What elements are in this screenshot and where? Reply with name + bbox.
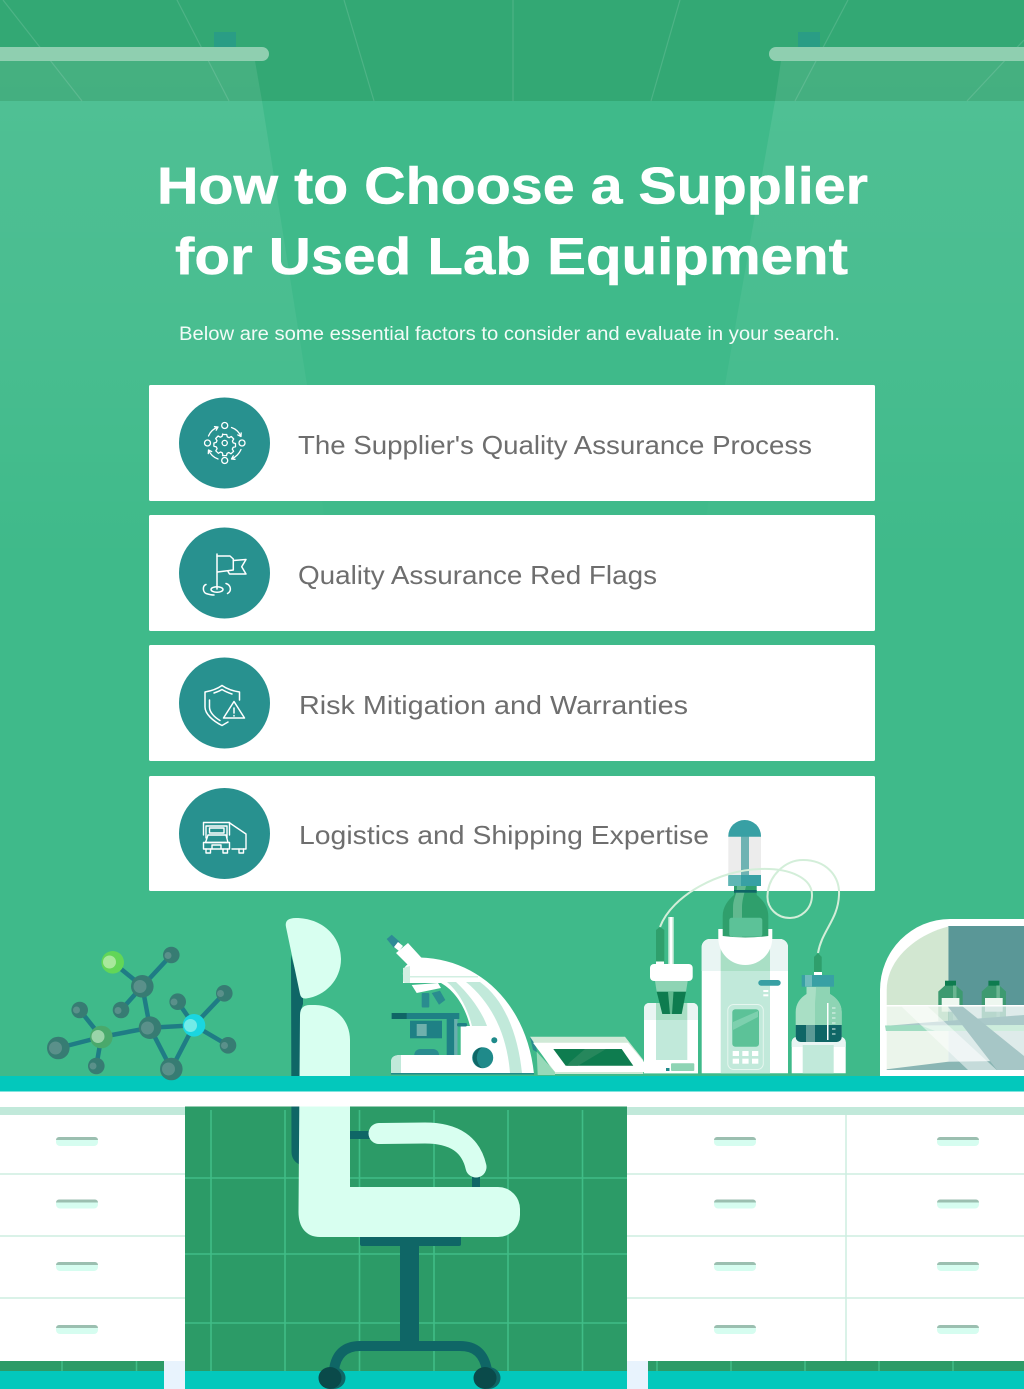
card: quality assurance process: The Supplier's Quality Assurance Process	[298, 430, 812, 460]
molecule model	[47, 947, 236, 1080]
left funnel device	[644, 917, 698, 1073]
card: red flags: Quality Assurance Red Flags	[298, 560, 657, 590]
title	[157, 158, 868, 286]
bottle top dispenser	[728, 820, 761, 886]
main analyser device	[702, 886, 788, 1073]
card: quality assurance process	[149, 385, 875, 501]
card: red flags	[149, 515, 875, 631]
floor and cabinet plinth	[0, 1361, 1024, 1389]
left drawers	[0, 1106, 185, 1361]
subtitle: Below are some essential factors to consider and evaluate in your search.	[179, 324, 840, 345]
right reagent bottle	[792, 953, 846, 1073]
ceiling lamp right	[769, 32, 1024, 61]
cabinet knee space with grid	[185, 1106, 627, 1371]
flexible tubing	[660, 860, 839, 953]
right drawers	[627, 1106, 1024, 1361]
title: for Used Lab Equipment	[175, 228, 848, 286]
chair	[286, 918, 520, 1389]
card: risk mitigation: Risk Mitigation and Warranties	[299, 690, 688, 720]
counter top	[0, 1076, 1024, 1106]
microscope	[387, 935, 534, 1074]
title: How to Choose a Supplier	[157, 158, 868, 216]
tablet device	[530, 1037, 644, 1075]
card: logistics and shipping	[149, 776, 875, 891]
card: logistics and shipping: Logistics and Shipping Expertise	[299, 820, 709, 850]
ceiling	[0, 0, 1024, 101]
light beam left	[0, 61, 330, 560]
light beam right	[700, 61, 1024, 560]
card: risk mitigation	[149, 645, 875, 761]
incubator cabinet	[880, 919, 1024, 1076]
ceiling lamp left	[0, 32, 269, 61]
